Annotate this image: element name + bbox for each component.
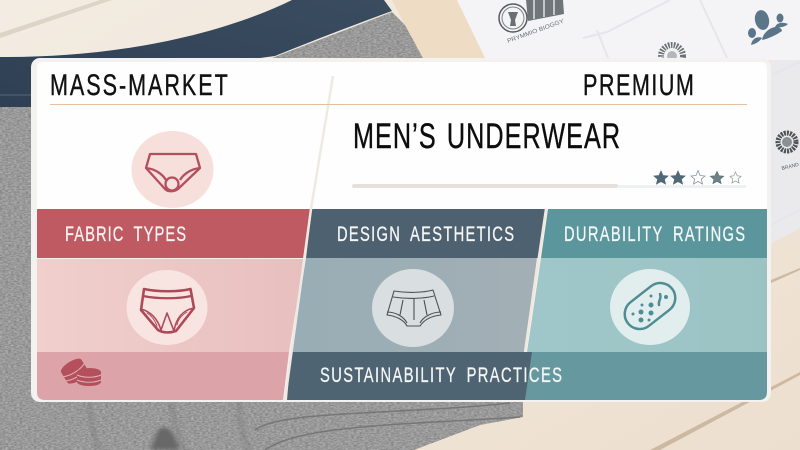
progress bar xyxy=(352,184,746,188)
icon: premium logo prints on white fabric xyxy=(499,0,800,172)
fabric types label: FABRIC TYPES xyxy=(65,222,186,246)
panel: durability ratings column xyxy=(527,209,767,352)
icon: boxer briefs in circle xyxy=(372,269,454,347)
sustainability practices label: SUSTAINABILITY PRACTICES xyxy=(320,363,562,387)
divider: slanted column separators xyxy=(285,76,546,400)
icon: premium logo prints on white fabric: BRAND xyxy=(781,162,800,172)
icon: people on white fabric xyxy=(748,9,788,45)
panel: design aesthetics column xyxy=(291,209,545,352)
comparison card xyxy=(31,58,771,402)
icon: briefs top circle xyxy=(132,131,214,208)
design aesthetics label: DESIGN AESTHETICS xyxy=(337,222,514,246)
header rule xyxy=(50,104,747,105)
icon: premium logo prints on white fabric: PRYMMIO BIOGGY xyxy=(507,19,565,45)
premium heading: PREMIUM xyxy=(583,67,694,102)
icon: stacked fabric rolls xyxy=(59,356,101,386)
mass-market heading: MASS-MARKET xyxy=(50,67,228,102)
star rating xyxy=(654,170,741,184)
durability ratings label: DURABILITY RATINGS xyxy=(564,222,745,246)
icon: briefs in circle xyxy=(126,270,208,345)
icon: fabric swatch with dots xyxy=(610,269,690,345)
panel: sustainability practices band xyxy=(287,352,767,400)
panel: fabric types column xyxy=(37,209,311,400)
title: MEN’S UNDERWEAR xyxy=(353,117,620,156)
